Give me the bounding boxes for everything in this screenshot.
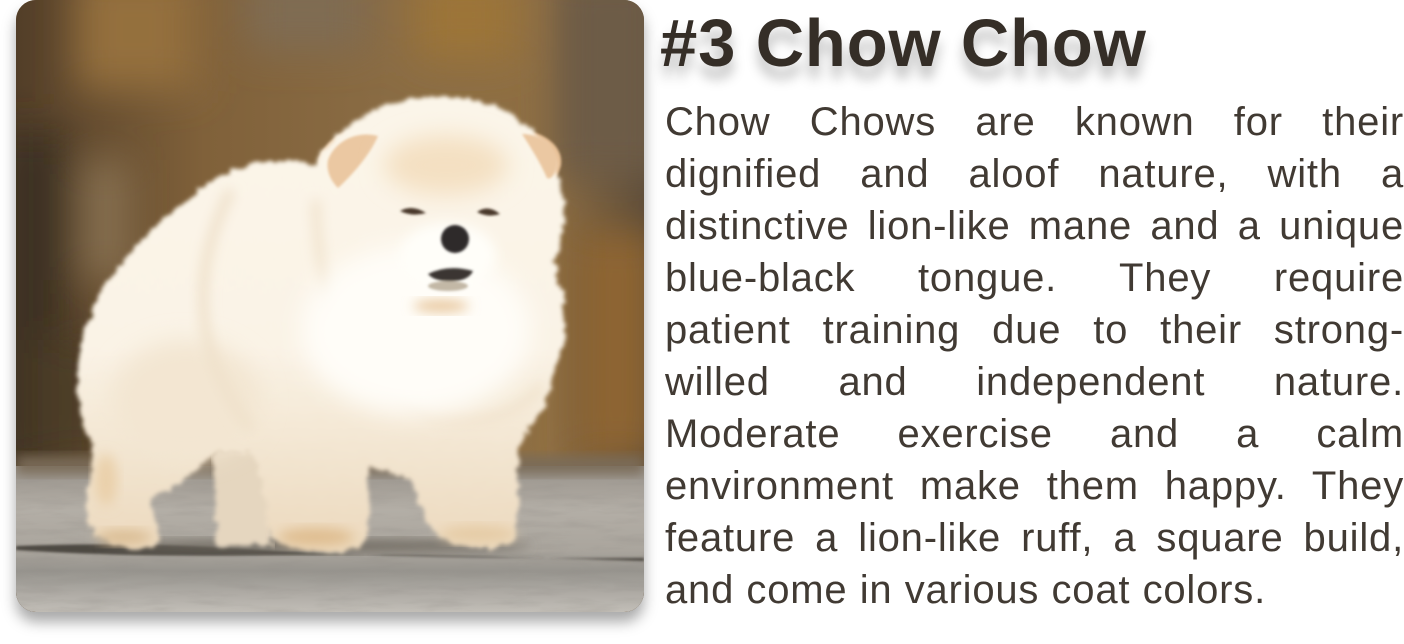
- description text: blue-black tongue. They require: [665, 256, 1404, 300]
- description text: patient training due to their strong-: [665, 308, 1404, 352]
- description text: and come in various coat colors.: [665, 568, 1266, 612]
- body, mane and legs silhouette: [78, 96, 563, 552]
- title: #3 Chow Chow: [660, 6, 1147, 81]
- blurred autumn background: [0, 0, 666, 612]
- inner ear re-drawn on top of fur edge: [327, 134, 557, 188]
- eyes: [400, 208, 500, 216]
- description text: willed and independent nature.: [665, 360, 1404, 404]
- description text: feature a lion-like ruff, a square build,: [665, 516, 1404, 560]
- nose and mouth: [428, 225, 473, 291]
- fur shading: [95, 135, 541, 546]
- photo: cream Chow Chow puppy standing on stone: [16, 0, 644, 612]
- description text: [665, 100, 1404, 612]
- description text: distinctive lion-like mane and a unique: [665, 204, 1404, 248]
- far rear leg: [214, 450, 272, 547]
- description text: Chow Chows are known for their: [665, 100, 1404, 144]
- puppy: [78, 96, 563, 552]
- description text: dignified and aloof nature, with a: [665, 152, 1404, 196]
- description text: environment make them happy. They: [665, 464, 1404, 508]
- description text: Moderate exercise and a calm: [665, 412, 1404, 456]
- stone ground: [16, 456, 644, 612]
- ears: [319, 129, 561, 195]
- muzzle: [400, 223, 496, 287]
